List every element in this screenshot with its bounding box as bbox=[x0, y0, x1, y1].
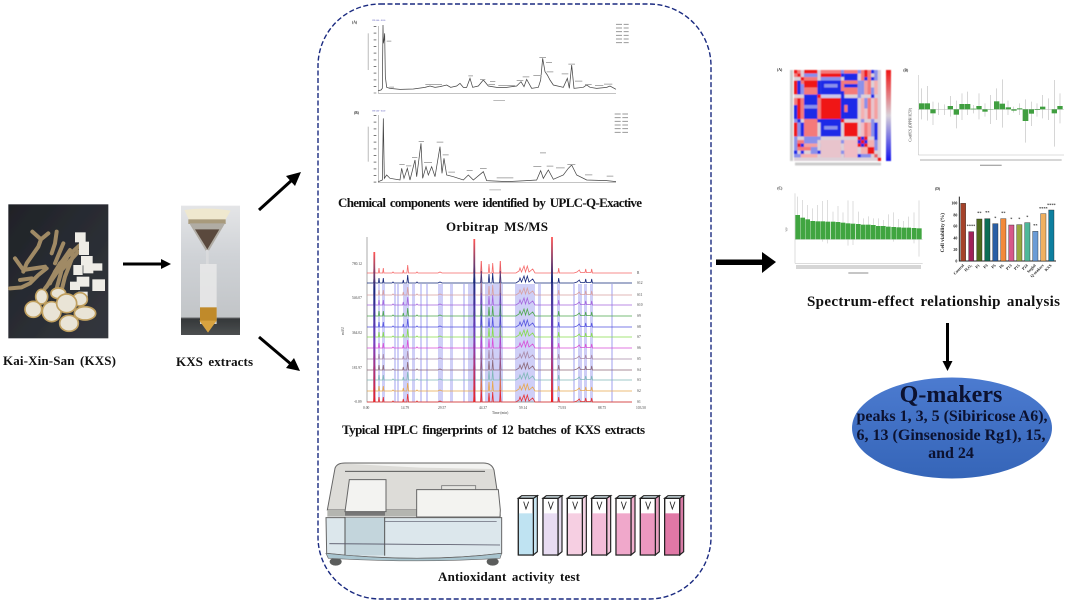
caption: Orbitrap MS/MS: Orbitrap MS/MS bbox=[446, 219, 548, 234]
cuvette 4 bbox=[592, 496, 611, 555]
cuvette 2 bbox=[543, 496, 562, 555]
batch labels bbox=[637, 271, 643, 404]
chart D: cell viability bars: Control bbox=[952, 262, 966, 276]
arrow: extracts to fingerprints bbox=[259, 337, 300, 371]
chart D: cell viability bars: ** bbox=[1033, 223, 1037, 228]
chart: UPLC chromatogram B: RT: 0.00 - 30.00 bbox=[372, 110, 385, 112]
arrow: extracts to chemical identification bbox=[259, 172, 301, 210]
chart D: cell viability bars: 0 bbox=[955, 258, 957, 263]
chart D: cell viability bars: Cell viability (%) bbox=[939, 213, 946, 252]
chart D: cell viability bars: 60 bbox=[953, 224, 957, 229]
chart D: cell viability bars: ** bbox=[985, 210, 989, 215]
chart D: cell viability bars: * bbox=[1026, 214, 1028, 219]
panel: central dashed rounded frame bbox=[318, 4, 711, 599]
batch labels: S11 bbox=[637, 293, 643, 297]
x axis ticks: 103.50 bbox=[636, 406, 646, 410]
chart D: cell viability bars: 80 bbox=[953, 212, 957, 217]
cuvette 7 bbox=[665, 496, 684, 555]
chart D: cell viability bars: KXS bbox=[1043, 262, 1053, 272]
arrow: to spectrum-effect analysis bbox=[716, 252, 776, 273]
photo: Kai-Xin-San herbs bbox=[8, 204, 108, 338]
caption: antioxidant activity test: Antioxidant activity test bbox=[438, 569, 581, 584]
chart D: cell viability bars: **** bbox=[967, 223, 975, 228]
arrow: herbs to extracts bbox=[123, 259, 171, 269]
batch labels: S8 bbox=[637, 325, 641, 329]
Q-makers heading: Q-makers bbox=[900, 382, 1002, 408]
cuvette 3 bbox=[567, 496, 586, 555]
chart B: coefficient bars: (B) bbox=[903, 69, 909, 73]
x axis ticks: 44.37 bbox=[479, 406, 487, 410]
chart D: cell viability bars: P1 bbox=[974, 263, 981, 270]
Q-makers detail text: peaks 1, 3, 5 (Sibiricose A6), bbox=[856, 408, 1048, 425]
cuvette 6 bbox=[640, 496, 659, 555]
chart: HPLC fingerprints bbox=[341, 237, 646, 415]
y axis ticks: 546.07 bbox=[352, 296, 362, 300]
chart D: cell viability bars: ** bbox=[977, 210, 981, 215]
chart D: cell viability bars: * bbox=[1010, 217, 1012, 222]
Q-makers detail text: and 24 bbox=[928, 445, 974, 462]
x axis ticks: Time (min) bbox=[492, 411, 509, 415]
icon: row of seven cuvettes bbox=[518, 496, 684, 555]
x axis ticks: 88.75 bbox=[598, 406, 606, 410]
chart A: correlation heatmap bbox=[777, 68, 891, 166]
batch labels: S10 bbox=[637, 303, 643, 307]
chart D: cell viability bars: P13 bbox=[1005, 263, 1013, 271]
photo: KXS extracts in funnel and tube bbox=[181, 206, 240, 335]
y axis ticks: 181.97 bbox=[352, 366, 362, 370]
batch labels: S6 bbox=[637, 346, 641, 350]
chart: UPLC chromatogram B bbox=[354, 110, 628, 190]
batch labels: S7 bbox=[637, 335, 641, 339]
icon: microplate reader instrument bbox=[326, 463, 502, 566]
chart: UPLC chromatogram A: (A) bbox=[352, 21, 358, 25]
callout: Q-makers ellipse bbox=[852, 378, 1052, 478]
batch labels: S1 bbox=[637, 400, 641, 404]
y axis ticks: -0.09 bbox=[354, 400, 362, 404]
x axis ticks: 0.00 bbox=[363, 406, 369, 410]
chart D: cell viability bars: Sugiol bbox=[1026, 262, 1037, 274]
chart C: VIP score bars bbox=[777, 187, 923, 274]
batch labels: S9 bbox=[637, 314, 641, 318]
chart D: cell viability bars: Q-makers bbox=[1029, 263, 1045, 278]
cuvette 5 bbox=[616, 496, 635, 555]
y axis ticks bbox=[341, 262, 362, 404]
batch labels: S4 bbox=[637, 368, 641, 372]
caption: HPLC fingerprints: Typical HPLC fingerprints of 12 batches of KXS extracts bbox=[342, 422, 645, 437]
chart D: cell viability bars: 20 bbox=[953, 247, 957, 252]
chart D: cell viability bars: **** bbox=[1047, 202, 1056, 207]
caption: spectrum-effect relationship analysis: Spectrum-effect relationship analysis bbox=[807, 294, 1060, 310]
label: KXS extracts: KXS extracts bbox=[176, 354, 253, 369]
chart: UPLC chromatogram A: RT: 0.00 - 30.00 bbox=[372, 20, 385, 22]
caption: chemical components: Chemical components were identified by UPLC-Q-Exactive bbox=[338, 195, 642, 210]
chart A: correlation heatmap: (A) bbox=[777, 68, 783, 72]
chart: UPLC chromatogram B: (B) bbox=[354, 111, 360, 115]
y axis ticks: 364.02 bbox=[352, 331, 362, 335]
chart D: cell viability bars: P6 bbox=[998, 263, 1005, 270]
chart D: cell viability bars: P15 bbox=[1013, 263, 1021, 271]
chart D: cell viability bars: **** bbox=[1039, 206, 1048, 211]
x axis ticks: 14.79 bbox=[401, 406, 409, 410]
chart B: coefficient bars: CoeffCS (DPPH IC50) bbox=[909, 107, 913, 142]
chart D: cell viability bars: ** bbox=[1001, 210, 1005, 215]
cuvette 1 bbox=[518, 496, 537, 555]
traces bbox=[367, 259, 632, 402]
chart D: cell viability bars: P5 bbox=[990, 263, 997, 270]
chart D: cell viability bars: 100 bbox=[951, 201, 957, 206]
main peak columns bbox=[373, 237, 553, 402]
x axis ticks: 29.57 bbox=[438, 406, 446, 410]
batch labels: R bbox=[637, 271, 640, 275]
chart D: cell viability bars: H₂O₂ bbox=[963, 262, 973, 272]
y axis ticks: 780.12 bbox=[352, 262, 362, 266]
chart D: cell viability bars bbox=[935, 187, 1056, 278]
x axis ticks: 59.14 bbox=[519, 406, 527, 410]
chart D: cell viability bars: P3 bbox=[982, 263, 989, 270]
batch labels: S3 bbox=[637, 378, 641, 382]
chart B: coefficient bars bbox=[903, 69, 1064, 166]
chart D: cell viability bars: * bbox=[994, 216, 996, 221]
batch labels: S12 bbox=[637, 281, 643, 285]
batch labels: S5 bbox=[637, 357, 641, 361]
chart C: VIP score bars: (C) bbox=[777, 187, 783, 191]
label: Kai-Xin-San (KXS): Kai-Xin-San (KXS) bbox=[3, 353, 116, 368]
shaded peak bands bbox=[373, 284, 613, 402]
chart D: cell viability bars: (D) bbox=[935, 187, 941, 191]
Q-makers detail text: 6, 13 (Ginsenoside Rg1), 15, bbox=[857, 427, 1045, 444]
chart D: cell viability bars: * bbox=[1018, 216, 1020, 221]
x axis ticks bbox=[363, 406, 646, 415]
y axis ticks: mAU bbox=[341, 327, 345, 335]
arrow: analysis to Q-makers bbox=[942, 323, 952, 371]
chart D: cell viability bars: 40 bbox=[953, 235, 957, 240]
chart C: VIP score bars: VIP bbox=[785, 227, 788, 232]
x axis ticks: 73.93 bbox=[558, 406, 566, 410]
chart D: cell viability bars: P24 bbox=[1021, 263, 1029, 271]
Q-makers detail text bbox=[856, 408, 1048, 462]
chart: UPLC chromatogram A bbox=[352, 20, 629, 101]
batch labels: S2 bbox=[637, 389, 641, 393]
